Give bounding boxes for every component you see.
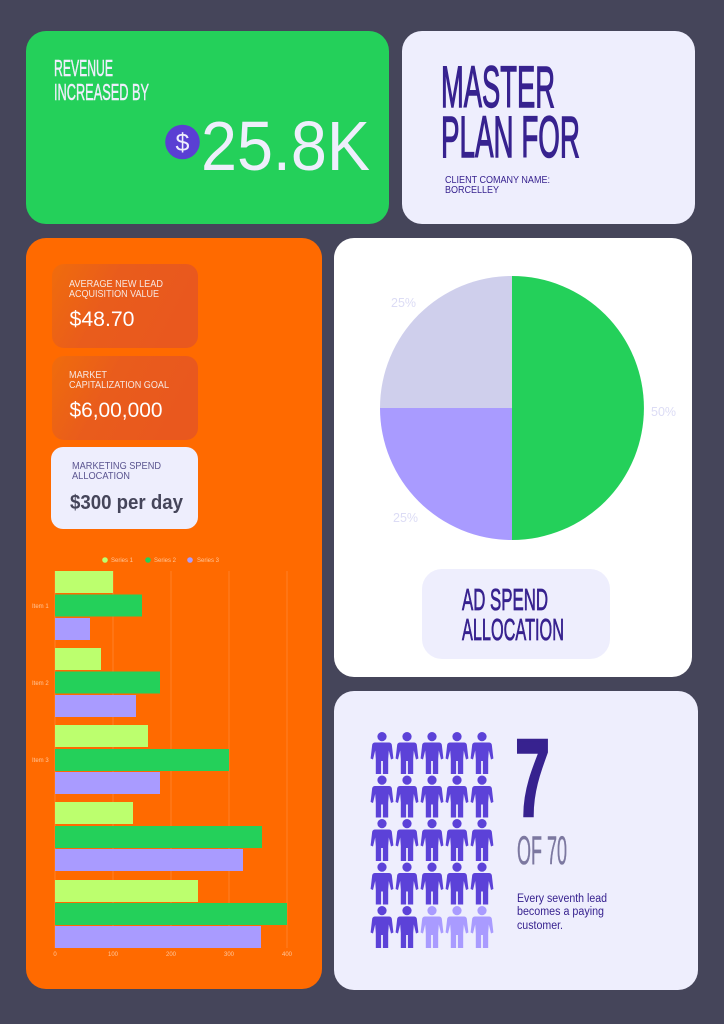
lead label: AVERAGE NEW LEAD — [69, 278, 163, 290]
pie labels: 25% — [393, 511, 418, 525]
description — [517, 893, 607, 932]
bar chart — [32, 557, 293, 958]
panel: revenue — [26, 31, 389, 224]
panel: conversion — [334, 691, 698, 990]
icon: dollar — [165, 125, 200, 159]
axis labels: 0 — [53, 952, 57, 958]
axis labels — [32, 604, 293, 958]
legend: Series 1 — [111, 558, 134, 564]
lead label — [69, 278, 163, 300]
description: customer. — [517, 920, 563, 932]
revenue heading: INCREASED BY — [54, 79, 149, 105]
ad spend label: ALLOCATION — [462, 612, 564, 647]
title: MASTER — [441, 55, 555, 120]
description: Every seventh lead — [517, 893, 607, 905]
spend label: MARKETING SPEND — [72, 460, 161, 472]
axis labels: 100 — [108, 952, 119, 958]
legend: Series 2 — [154, 558, 177, 564]
lead value: $48.70 — [70, 307, 135, 331]
series 3 bars — [55, 618, 261, 948]
card: lead value — [52, 264, 198, 348]
title — [441, 55, 580, 170]
revenue value: 25.8K — [201, 107, 370, 185]
panel: conversion: OF 70 — [517, 829, 567, 873]
market label: MARKET — [69, 369, 107, 381]
pie labels — [391, 296, 676, 525]
axis labels: 400 — [282, 952, 293, 958]
lead label: ACQUISITION VALUE — [69, 288, 159, 300]
axis labels: 200 — [166, 952, 177, 958]
market label: CAPITALIZATION GOAL — [69, 379, 169, 391]
market label — [69, 369, 169, 391]
revenue heading: REVENUE — [54, 55, 113, 81]
pie chart — [380, 276, 676, 540]
icon: dollar: $ — [176, 129, 190, 157]
ad spend label: AD SPEND — [462, 582, 548, 617]
card: market goal — [52, 356, 198, 440]
spend value: $300 per day — [70, 491, 184, 514]
panel: ad spend — [334, 238, 692, 677]
legend — [102, 557, 220, 564]
market value: $6,00,000 — [70, 398, 163, 422]
big seven: 7 — [515, 717, 550, 840]
panel: master plan — [402, 31, 695, 224]
series 2 bars — [55, 594, 287, 925]
axis labels: Item 2 — [32, 681, 49, 687]
pictogram — [371, 732, 493, 948]
panel: metrics and chart — [26, 238, 322, 989]
description: becomes a paying — [517, 906, 604, 918]
panel: master plan: PLAN FOR — [441, 105, 580, 170]
revenue heading — [54, 55, 149, 105]
legend: Series 3 — [197, 558, 220, 564]
axis labels: Item 3 — [32, 758, 49, 764]
spend label — [72, 460, 161, 482]
series 1 bars — [55, 571, 198, 902]
spend label: ALLOCATION — [72, 470, 130, 482]
client name: BORCELLEY — [445, 185, 499, 196]
axis labels: 300 — [224, 952, 235, 958]
client name: CLIENT COMANY NAME: — [445, 175, 550, 186]
ad spend label — [422, 569, 610, 659]
axis labels: Item 1 — [32, 604, 49, 610]
client name — [445, 175, 550, 196]
pie labels: 25% — [391, 296, 416, 310]
card: spend — [51, 447, 198, 529]
pie labels: 50% — [651, 405, 676, 419]
